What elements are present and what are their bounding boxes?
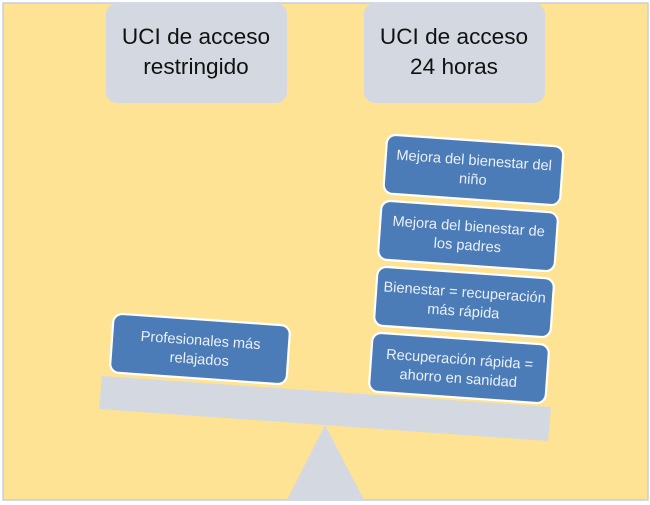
card: Mejora del bienestar de los padres: los padres bbox=[433, 236, 501, 256]
card: Recuperación rápida = ahorro en sanidad: ahorro en sanidad bbox=[399, 367, 517, 391]
heading: UCI de acceso 24 horas: UCI de acceso bbox=[380, 24, 528, 49]
scale beam bbox=[99, 376, 551, 441]
heading: UCI de acceso restringido bbox=[106, 3, 287, 103]
card: Mejora del bienestar de los padres: Mejora del bienestar de bbox=[392, 214, 545, 240]
card: Recuperación rápida = ahorro en sanidad bbox=[369, 332, 549, 404]
heading: UCI de acceso 24 horas bbox=[364, 3, 545, 103]
card: Bienestar = recuperación más rápida: Bienestar = recuperación bbox=[383, 279, 546, 307]
heading: UCI de acceso restringido: UCI de acceso bbox=[122, 24, 270, 49]
card: Mejora del bienestar del niño: niño bbox=[458, 171, 487, 189]
card: Mejora del bienestar de los padres bbox=[378, 200, 558, 272]
card: Profesionales más relajados: relajados bbox=[169, 350, 229, 370]
card: Recuperación rápida = ahorro en sanidad: Recuperación rápida = bbox=[386, 347, 534, 373]
card: Mejora del bienestar del niño bbox=[383, 134, 564, 206]
card: Mejora del bienestar del niño: Mejora del bienestar del bbox=[396, 148, 552, 174]
card: Bienestar = recuperación más rápida: más rápida bbox=[427, 301, 501, 323]
card: Profesionales más relajados bbox=[110, 313, 290, 385]
card: Bienestar = recuperación más rápida bbox=[374, 266, 554, 338]
heading: UCI de acceso 24 horas: 24 horas bbox=[410, 54, 498, 79]
heading: UCI de acceso restringido: restringido bbox=[143, 54, 249, 79]
card: Profesionales más relajados: Profesionales más bbox=[140, 329, 261, 353]
scale fulcrum bbox=[287, 425, 364, 500]
